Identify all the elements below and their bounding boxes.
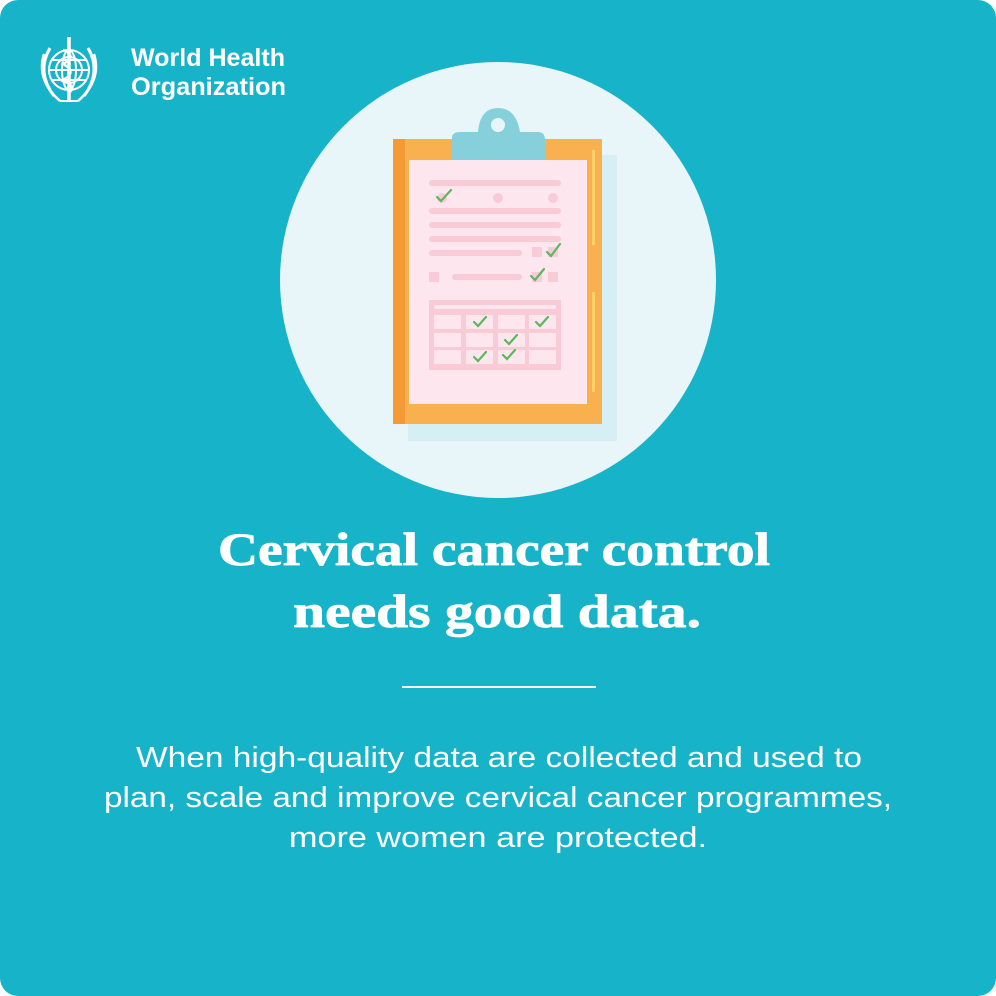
board: [393, 139, 602, 424]
logo: WHO: [42, 37, 286, 101]
body text: When high-quality data are collected and used to: [136, 742, 862, 774]
icon: WHO emblem: [42, 37, 96, 101]
body text: plan, scale and improve cervical cancer programmes,: [104, 782, 892, 814]
clip: [452, 108, 545, 160]
title: Cervical cancer control: [218, 524, 770, 576]
shadow: [408, 155, 617, 441]
paper: [409, 160, 587, 404]
illustration circle: [280, 62, 716, 498]
icon: clipboard: [393, 108, 617, 441]
title: needs good data.: [293, 586, 701, 638]
title: [218, 524, 770, 638]
logo: WHO: Organization: [131, 73, 286, 101]
checkmarks: [437, 190, 560, 361]
body text: more women are protected.: [289, 822, 707, 854]
divider: [402, 686, 596, 688]
body text: [104, 742, 892, 854]
table cells: [434, 305, 556, 364]
logo text: World Health: [131, 44, 285, 72]
